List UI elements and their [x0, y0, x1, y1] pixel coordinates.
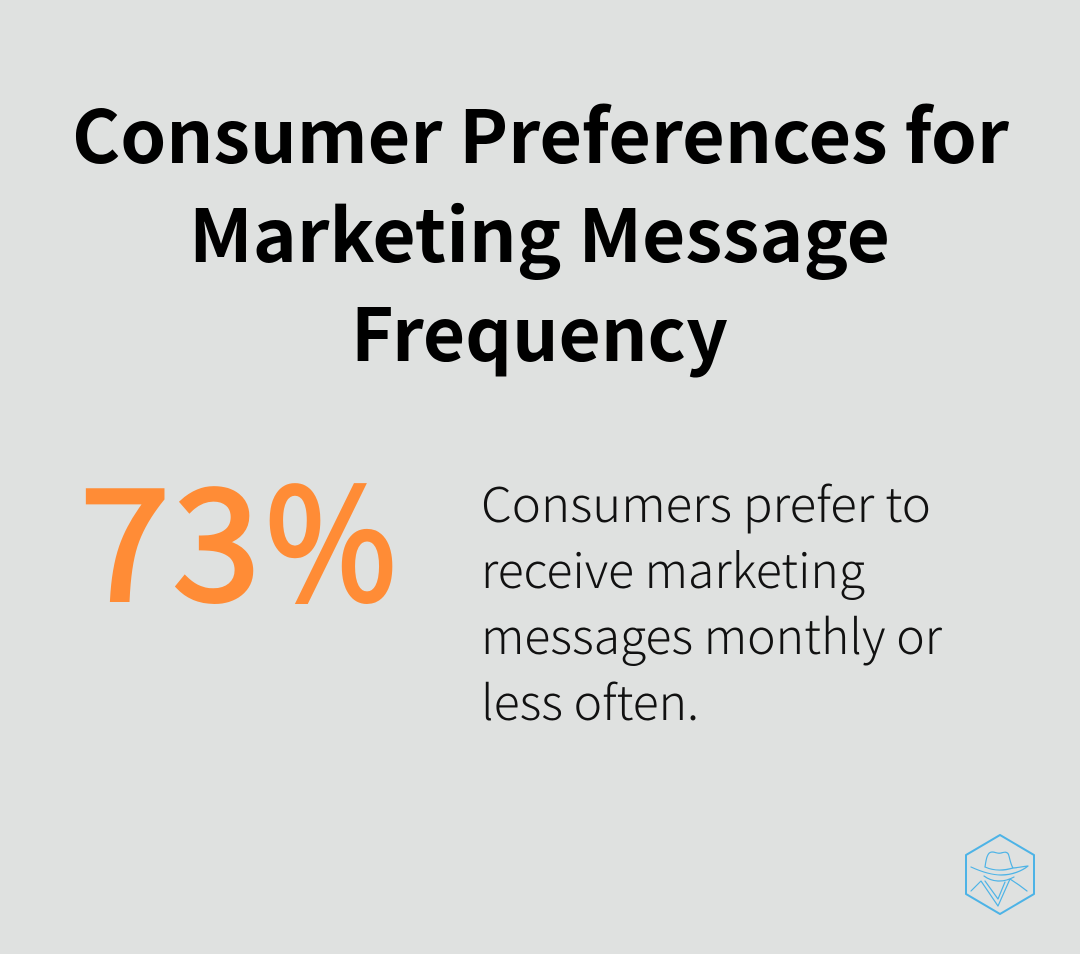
title: [72, 79, 1009, 383]
description text: receive marketing: [481, 532, 865, 602]
statistic: 73%: 7: [80, 422, 170, 645]
statistic: 73%: 3: [173, 422, 260, 645]
description text: messages monthly or: [481, 598, 943, 668]
icon: hexagon logo with spy hat: [966, 835, 1034, 914]
title: Frequency: [351, 277, 728, 383]
title: Consumer Preferences for: [72, 79, 1009, 185]
title: Marketing Message: [189, 178, 890, 284]
description text: Consumers prefer to: [481, 466, 931, 536]
statistic: 73%: %: [266, 422, 396, 645]
statistic: 73%: [80, 422, 396, 645]
description text: less often.: [481, 664, 699, 734]
description text: [481, 466, 943, 734]
